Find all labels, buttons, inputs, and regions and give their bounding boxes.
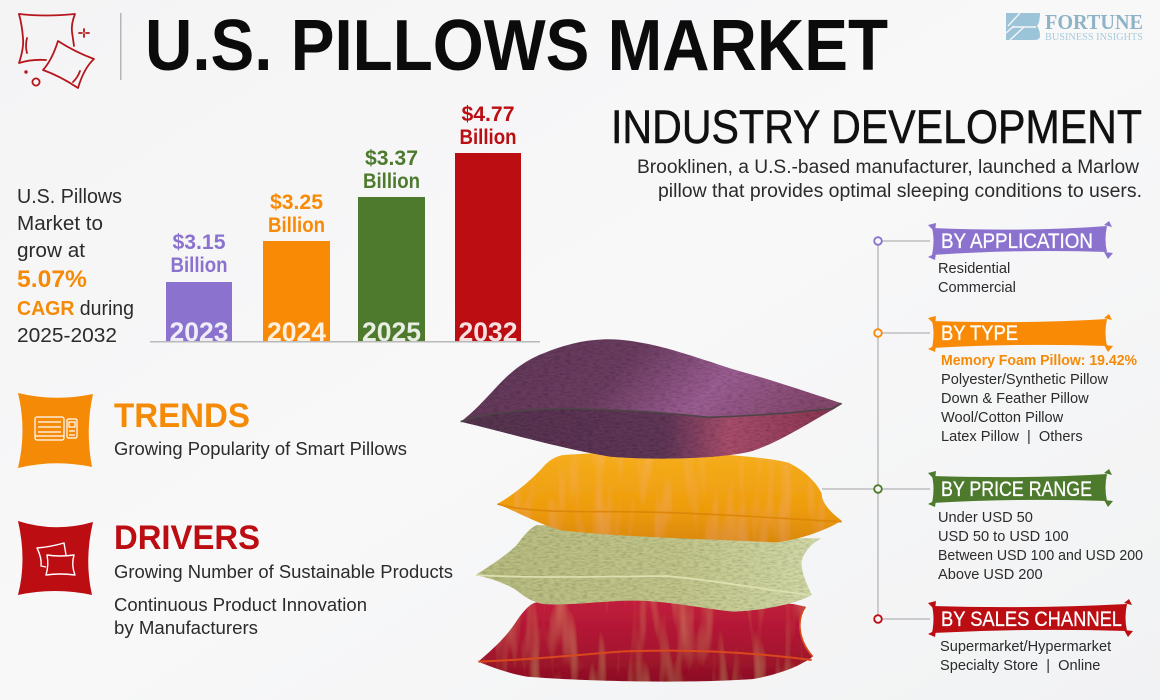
pillow: orange — [497, 452, 842, 542]
logo: Fortune Business Insights: BUSINESS INSIGHTS — [1045, 32, 1143, 43]
pillow: red — [478, 599, 813, 682]
bar 2024: $3.25 — [270, 191, 323, 214]
panel: by type — [928, 314, 1137, 445]
banner: by application — [928, 221, 1113, 260]
text: drivers items — [114, 562, 453, 638]
text: type items: Latex Pillow | Others — [941, 429, 1083, 445]
text: price range items: Under USD 50 — [938, 510, 1033, 526]
bar 2032 — [455, 103, 521, 347]
text: price range items: USD 50 to USD 100 — [938, 529, 1069, 545]
banner: by type — [928, 314, 1113, 352]
panel: drivers — [18, 519, 453, 638]
bar 2024: 2024 — [267, 317, 326, 347]
bar 2023 — [166, 231, 232, 347]
heading: trends: TRENDS — [114, 397, 250, 435]
panel: by application — [928, 221, 1113, 296]
text: price range items — [938, 510, 1143, 583]
illustration: pillow stack — [461, 339, 842, 682]
bar 2024 — [263, 191, 330, 347]
text: type items: Memory Foam Pillow: 19.42% — [941, 352, 1137, 369]
bar 2032: $4.77 — [462, 103, 514, 126]
bar 2023: $3.15 — [172, 231, 226, 254]
logo: Fortune Business Insights — [1006, 10, 1143, 43]
text: type items: Wool/Cotton Pillow — [941, 410, 1064, 426]
text: price range items: Above USD 200 — [938, 567, 1043, 583]
bar 2025: $3.37 — [365, 147, 418, 170]
text: trends item: Growing Popularity of Smart Pillows — [114, 439, 407, 459]
chart baseline — [150, 341, 540, 342]
banner: by price range — [928, 469, 1113, 507]
text: CAGR callout: U.S. Pillows — [17, 186, 122, 208]
text: industry development description: Brooklinen, a U.S.-based manufacturer, launched a Marlow — [637, 157, 1139, 178]
text: CAGR callout — [17, 186, 134, 347]
panel: trends — [18, 393, 407, 468]
connector nodes — [874, 237, 882, 623]
banner: by application: BY APPLICATION — [941, 230, 1093, 253]
banner: by sales channel — [928, 599, 1133, 637]
banner: by price range: BY PRICE RANGE — [941, 478, 1092, 501]
text: type items: Polyester/Synthetic Pillow — [941, 372, 1109, 388]
bar 2023: 2023 — [170, 317, 228, 347]
text: application items: Commercial — [938, 280, 1016, 296]
text: industry development description: pillow that provides optimal sleeping conditions to users. — [658, 181, 1142, 202]
title: U.S. PILLOWS MARKET — [145, 6, 888, 86]
bar 2024: Billion — [268, 214, 325, 237]
text: CAGR callout: Market to — [17, 213, 103, 235]
bar 2032: 2032 — [458, 317, 518, 347]
text: sales channel items: Specialty Store | Online — [940, 658, 1100, 674]
icon: trends pillow — [18, 393, 93, 468]
panel: by price range — [928, 469, 1143, 583]
bar chart — [166, 103, 521, 347]
text: sales channel items — [940, 639, 1111, 674]
banner: by sales channel: BY SALES CHANNEL — [941, 608, 1122, 631]
text: application items — [938, 261, 1016, 296]
text: drivers items: Growing Number of Sustainable Products — [114, 562, 453, 582]
text: type items — [941, 352, 1137, 445]
text: type items: Down & Feather Pillow — [941, 391, 1089, 407]
bar 2025: 2025 — [362, 317, 421, 347]
text: price range items: Between USD 100 and USD 200 — [938, 548, 1143, 564]
pillow: purple — [461, 339, 842, 459]
bar 2025 — [358, 147, 425, 347]
text: application items: Residential — [938, 261, 1010, 277]
panel: by sales channel — [928, 599, 1133, 674]
header divider — [120, 13, 122, 80]
text: CAGR callout: 5.07% — [17, 266, 87, 293]
banner: by type: BY TYPE — [941, 322, 1018, 345]
text: CAGR callout: 2025-2032 — [17, 325, 117, 347]
icon: drivers pillow — [18, 521, 93, 595]
logo: Fortune Business Insights: FORTUNE — [1045, 10, 1143, 34]
pillow: green — [476, 525, 822, 612]
icon: pillows logo — [19, 14, 94, 88]
text: drivers items: Continuous Product Innovation — [114, 595, 367, 615]
text: CAGR callout: grow at — [17, 240, 85, 262]
heading: drivers: DRIVERS — [114, 519, 260, 557]
text: drivers items: by Manufacturers — [114, 618, 258, 638]
text: sales channel items: Supermarket/Hypermarket — [940, 639, 1111, 655]
text: industry development description — [637, 157, 1142, 202]
connector tree — [822, 241, 930, 619]
bar 2023: Billion — [170, 254, 228, 277]
text: CAGR callout: CAGR during — [17, 298, 134, 320]
bar 2025: Billion — [363, 170, 420, 193]
bar 2032: Billion — [460, 126, 516, 149]
